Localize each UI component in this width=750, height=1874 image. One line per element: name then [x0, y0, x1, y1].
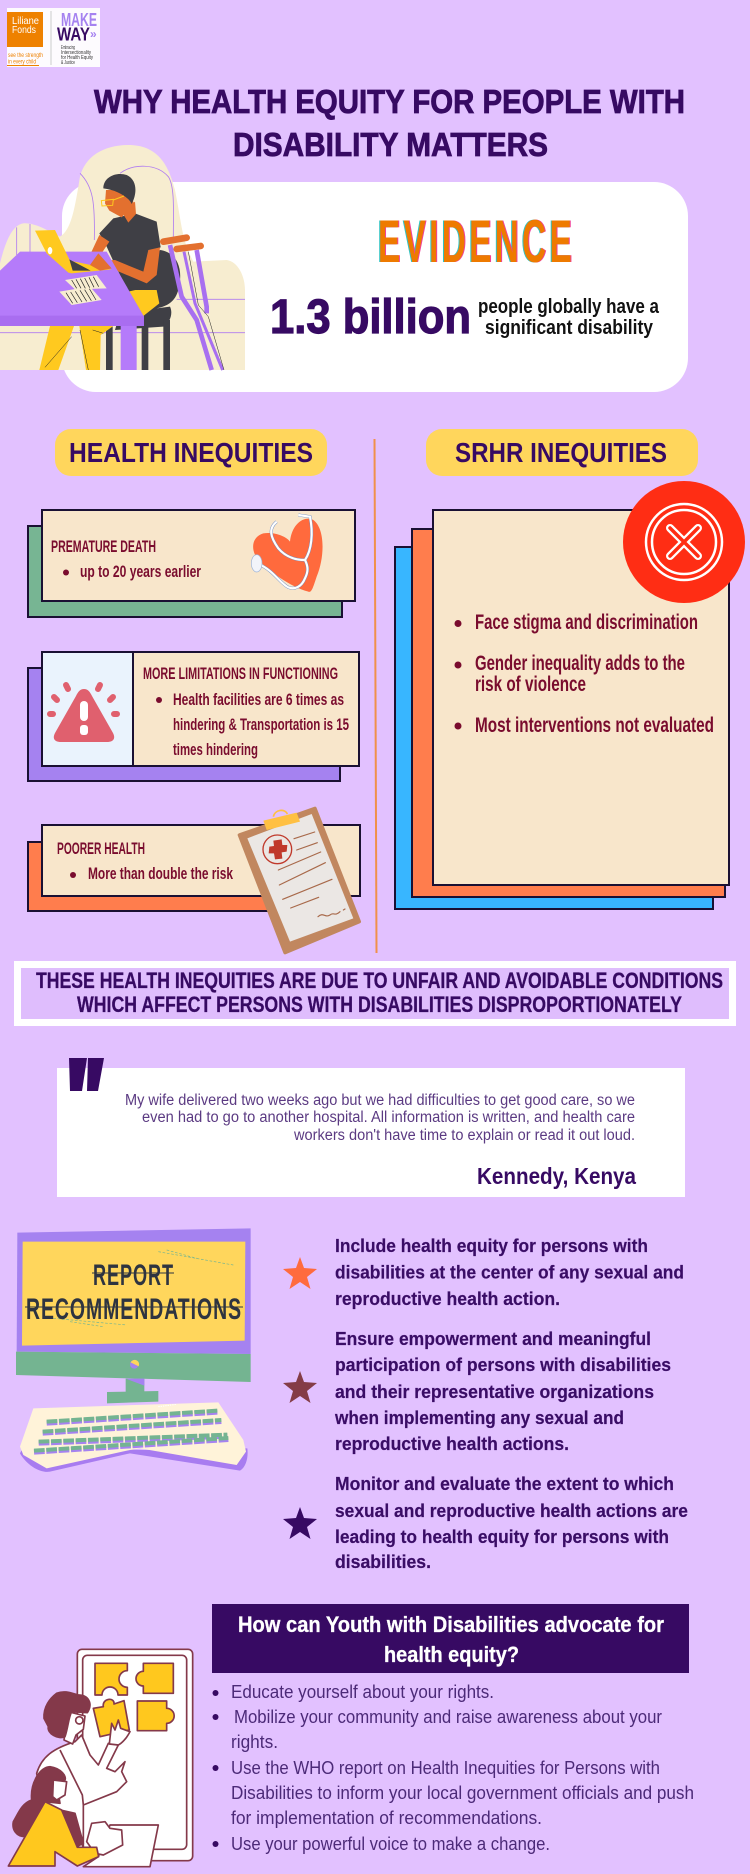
illustration: computer with report recommendations: RECOMMENDATIONS: [26, 1293, 242, 1326]
list: advocacy actions: rights.: [231, 1732, 278, 1752]
heading: how can youth advocate: How can Youth with Disabilities advocate for: [238, 1612, 664, 1637]
illustration: computer with report recommendations: [16, 1228, 251, 1472]
heading: SRHR inequities: [426, 429, 698, 476]
icon: orange star: [283, 1257, 317, 1289]
icon: purple star: [283, 1507, 317, 1539]
recommendation 2: and their representative organizations: [335, 1381, 654, 1402]
illustration: person with crutches at laptop: [0, 145, 245, 370]
list: advocacy actions: [212, 1682, 694, 1854]
heading: evidence: [377, 208, 576, 275]
recommendation 2: participation of persons with disabilities: [335, 1354, 671, 1375]
logos: Liliane Fonds and Make Way: Liliane: [12, 16, 39, 27]
title: WHY HEALTH EQUITY FOR PEOPLE WITH: [94, 83, 685, 120]
title: DISABILITY MATTERS: [233, 126, 548, 163]
panel: poorer health: POORER HEALTH: [57, 839, 145, 858]
text: people globally have a significant disability: people globally have a: [478, 296, 660, 318]
recommendation 1: disabilities at the center of any sexual and: [335, 1262, 684, 1282]
panel: more limitations in functioning: times hindering: [173, 740, 258, 759]
heading: SRHR inequities: SRHR INEQUITIES: [455, 437, 667, 468]
logos: Liliane Fonds and Make Way: WAY: [57, 24, 90, 44]
title: [94, 83, 685, 163]
panel: quote: My wife delivered two weeks ago but we had difficulties to get good care, so we: [125, 1092, 635, 1109]
logos: Liliane Fonds and Make Way: Intersectionality: [61, 50, 91, 56]
heading: evidence: EVIDENCE: [379, 208, 576, 275]
heading: health inequities: HEALTH INEQUITIES: [69, 437, 313, 468]
panel: more limitations in functioning: Health facilities are 6 times as: [173, 690, 344, 709]
list: advocacy actions: Use your powerful voice to make a change.: [231, 1834, 550, 1854]
panel: premature death: up to 20 years earlier: [80, 562, 201, 581]
icon: medical clipboard: [239, 808, 359, 953]
vertical divider: [374, 439, 376, 953]
logos: Liliane Fonds and Make Way: [7, 8, 100, 67]
panel: SRHR inequities: risk of violence: [475, 673, 586, 696]
recommendation 3: [283, 1473, 688, 1572]
logos: Liliane Fonds and Make Way: Embracing: [61, 45, 75, 51]
panel: evidence card: [62, 182, 688, 392]
recommendation 2: Ensure empowerment and meaningful: [335, 1328, 651, 1349]
recommendation 1: [283, 1235, 684, 1309]
list: advocacy actions: for implementation of recommendations.: [231, 1808, 542, 1828]
recommendation 2: when implementing any sexual and: [334, 1407, 624, 1428]
recommendation 3: disabilities.: [335, 1551, 431, 1572]
statistic: 1.3 billion: 1.3 billion: [270, 291, 471, 344]
heading: how can youth advocate: health equity?: [384, 1642, 519, 1667]
heading: how can youth advocate: [212, 1604, 689, 1673]
logos: Liliane Fonds and Make Way: & Justice: [61, 60, 75, 66]
illustration: two people solving a puzzle on a tablet: [8, 1649, 193, 1867]
icon: maroon star: [283, 1371, 317, 1403]
icon: heart with stethoscope: [251, 515, 323, 592]
logos: Liliane Fonds and Make Way: see the strength: [8, 52, 43, 59]
panel: more limitations in functioning: MORE LIMITATIONS IN FUNCTIONING: [143, 664, 338, 683]
panel: SRHR inequities: [395, 481, 745, 909]
panel: quote: even had to go to another hospital. All information is written, and health care: [142, 1109, 635, 1126]
recommendation 3: sexual and reproductive health actions are: [335, 1500, 688, 1521]
text: people globally have a significant disability: [478, 296, 660, 339]
icon: alert triangle: [50, 685, 117, 742]
recommendation 2: [283, 1328, 671, 1454]
logos: Liliane Fonds and Make Way: Fonds: [12, 25, 36, 36]
list: advocacy actions: Disabilities to inform your local government officials and push: [231, 1783, 694, 1803]
heading: evidence: EVIDENCE: [378, 208, 575, 275]
recommendation 3: leading to health equity for persons with: [335, 1526, 669, 1547]
heading: evidence: EVIDENCE: [377, 208, 574, 275]
panel: more limitations in functioning: hindering & Transportation is 15: [173, 715, 349, 734]
icon: quotation mark: [69, 1058, 104, 1091]
panel: quote: workers don't have time to explain or read it out loud.: [293, 1127, 635, 1144]
list: advocacy actions: Educate yourself about your rights.: [231, 1682, 494, 1702]
recommendation 3: Monitor and evaluate the extent to which: [335, 1473, 674, 1494]
heading: health inequities: [55, 429, 327, 476]
text: people globally have a significant disability: significant disability: [485, 317, 654, 339]
list: advocacy actions: Mobilize your community and raise awareness about your: [234, 1707, 662, 1727]
logos: Liliane Fonds and Make Way: in every child: [8, 58, 36, 66]
panel: poorer health: More than double the risk: [88, 864, 233, 883]
recommendation 1: reproductive health action.: [335, 1288, 560, 1309]
panel: poorer health: [28, 808, 360, 953]
logos: Liliane Fonds and Make Way: for Health Equity: [61, 55, 93, 61]
logos: Liliane Fonds and Make Way: »: [90, 27, 97, 41]
panel: quote: [57, 1058, 685, 1197]
icon: red circle with cross: [623, 481, 745, 603]
panel: quote: Kennedy, Kenya: [477, 1163, 636, 1189]
panel: premature death: PREMATURE DEATH: [51, 537, 156, 556]
list: advocacy actions: Use the WHO report on Health Inequities for Persons with: [231, 1758, 660, 1778]
panel: premature death: [28, 510, 355, 617]
recommendation 2: reproductive health actions.: [335, 1433, 569, 1454]
panel: more limitations in functioning: [28, 652, 359, 781]
illustration: computer with report recommendations: REPORT: [93, 1259, 174, 1292]
logos: Liliane Fonds and Make Way: MAKE: [61, 10, 97, 30]
banner: unfair and avoidable conditions: [18, 964, 732, 1022]
recommendation 1: Include health equity for persons with: [335, 1235, 648, 1256]
